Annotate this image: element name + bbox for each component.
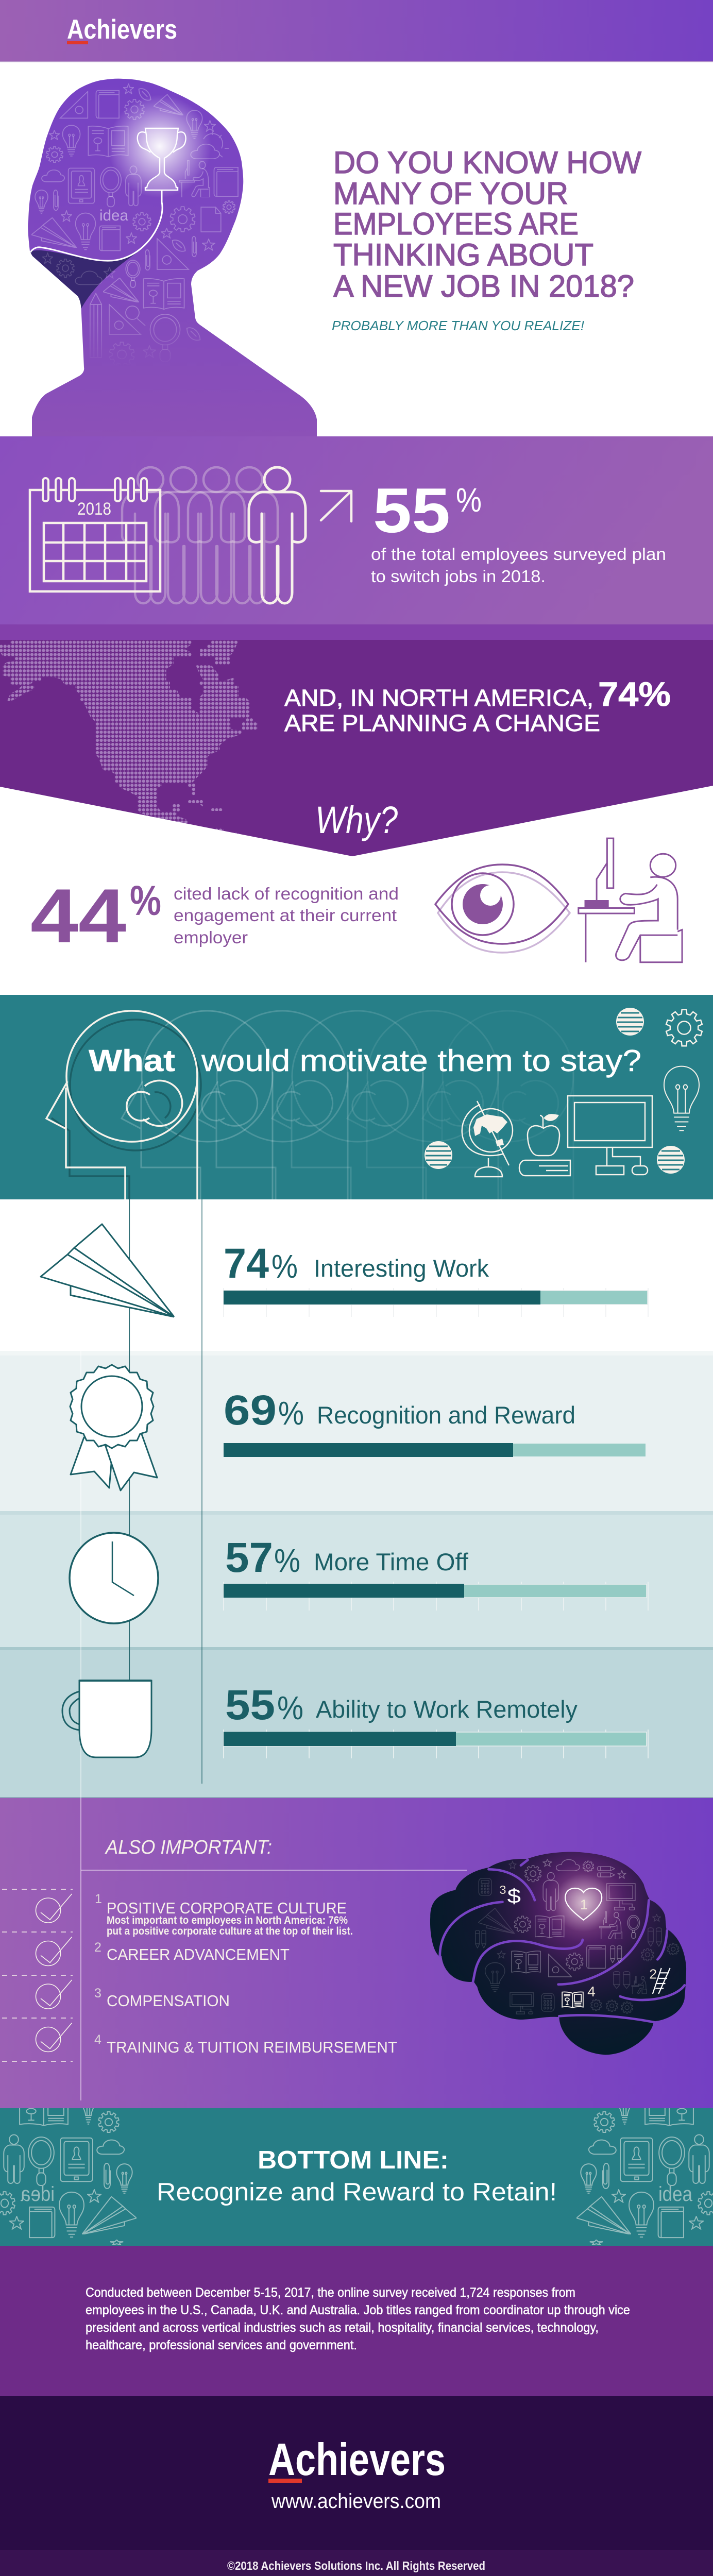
icon: striped circles (425, 1008, 685, 1174)
stat: 55 percent: % (277, 1689, 303, 1726)
logo: Achievers footer: Achievers (268, 2434, 446, 2485)
text: methodology (86, 2285, 630, 2352)
text: bottom line: Recognize and Reward to Retain! (157, 2178, 557, 2206)
heading: do you know: A NEW JOB IN 2018? (333, 269, 634, 303)
icon label: idea: idea (99, 207, 128, 224)
icon: ladder (653, 1968, 670, 1994)
pattern: right icons: idea (658, 2183, 693, 2206)
stat: 69 percent (224, 1387, 575, 1434)
icon: repeating ghost heads (122, 1011, 573, 1206)
bar: 57 percent (224, 1582, 648, 1611)
icon: paper plane (41, 1224, 174, 1317)
panel: footer (0, 2396, 713, 2576)
text: methodology: Conducted between December 5-15, 2017, the online survey received 1,724 responses from (86, 2285, 575, 2300)
panel: what would motivate them to stay (0, 995, 713, 1206)
brain numerals: 1 (580, 1897, 588, 1912)
stat: 55 percent: 55 (225, 1682, 275, 1728)
heading: what would motivate: What (89, 1044, 175, 1078)
stat: 55 percent: 55 (373, 476, 450, 546)
text: north america statistic: ARE PLANNING A CHANGE (284, 710, 600, 736)
text: survey description: to switch jobs in 2018. (371, 567, 546, 586)
stat: 69 percent: Recognition and Reward (317, 1401, 575, 1429)
pattern: right icons (576, 2108, 713, 2245)
stat: 74 percent: Interesting Work (314, 1255, 489, 1282)
text: methodology: president and across vertical industries such as retail, hospitality, financial services, technology, (86, 2320, 599, 2335)
panel: bottom line (0, 2108, 713, 2246)
list: ranked motivators: put a positive corporate culture at the top of their list. (107, 1925, 353, 1937)
text: lack of recognition: employer (174, 928, 248, 947)
text: lack of recognition (174, 884, 399, 947)
text: methodology: employees in the U.S., Canada, U.K. and Australia. Job titles ranged from coordinator up through vice (86, 2303, 630, 2317)
list: ranked motivators: 4 (94, 2032, 101, 2047)
text: bottom line: BOTTOM LINE: (258, 2146, 449, 2174)
icon: calendar 2018 (30, 478, 160, 591)
row: ability to work remotely (62, 1680, 648, 1758)
icon: heart (554, 1874, 613, 1932)
brain numerals: 2 (649, 1967, 657, 1982)
brain numerals: 4 (587, 1983, 596, 1999)
icon: coffee mug (62, 1680, 151, 1757)
stat: 57 percent: More Time Off (314, 1548, 469, 1575)
brain icons, bright (512, 1859, 639, 1977)
arrow: up and to the right (321, 491, 351, 521)
bar: 74 percent (224, 1288, 648, 1317)
pattern: left icons: idea (20, 2183, 55, 2206)
text: lack of recognition: cited lack of recognition and (174, 884, 399, 903)
decorative connecting lines (81, 1199, 202, 1798)
icon: head silhouette with trophy and icons (21, 72, 330, 439)
list: ranked motivators: POSITIVE CORPORATE CULTURE (107, 1899, 347, 1917)
text: copyright: ©2018 Achievers Solutions Inc. All Rights Reserved (227, 2559, 485, 2572)
heading: do you know: MANY OF YOUR (333, 176, 568, 211)
icon: apple on book (519, 1114, 570, 1176)
brain icons, dim (476, 1861, 679, 2014)
stat: 55 percent: Ability to Work Remotely (316, 1696, 578, 1723)
text: methodology: healthcare, professional services and government. (86, 2338, 357, 2352)
icon: brain (430, 1852, 686, 2055)
list: ranked motivators: 2 (94, 1940, 101, 1955)
row: interesting work (41, 1224, 648, 1317)
brain highlighted open book (562, 1992, 583, 2008)
stat: 55 percent (225, 1682, 578, 1728)
icon: front person (249, 467, 305, 603)
stat: 44 percent: 44 (30, 873, 126, 959)
heading: do you know (333, 145, 641, 303)
text: survey description: of the total employees surveyed plan (371, 545, 666, 564)
heading: also important: ALSO IMPORTANT: (105, 1837, 272, 1858)
glow behind trophy (108, 95, 211, 198)
text: lack of recognition: engagement at their current (174, 906, 397, 925)
bar: 55 percent (224, 1730, 648, 1758)
row: recognition and reward (70, 1365, 646, 1490)
stat: 55 percent: % (456, 481, 482, 519)
stat: 44 percent (30, 873, 161, 959)
heading: do you know: EMPLOYEES ARE (333, 207, 579, 241)
icon: gear (666, 1010, 702, 1046)
icon: light bulb (664, 1066, 699, 1130)
icon: eye (435, 865, 570, 953)
icon: monitor (568, 1096, 652, 1175)
icon: clock (70, 1533, 158, 1623)
stat: 57 percent: 57 (225, 1534, 273, 1581)
icon: calendar 2018: 2018 (77, 499, 111, 519)
stat: 74 percent: % (271, 1248, 298, 1285)
stat: 44 percent: % (130, 877, 161, 924)
panel: also important (0, 1798, 713, 2108)
pattern: left icons (0, 2108, 137, 2245)
brain grooves (440, 1860, 685, 2022)
list: ranked motivators (94, 1892, 397, 2056)
ghost people row (122, 467, 278, 603)
dark jaw flap (30, 250, 137, 309)
text: north america statistic (284, 675, 671, 736)
stat: 69 percent: 69 (224, 1387, 277, 1434)
icon: globe (462, 1101, 513, 1177)
list: ranked motivators: TRAINING & TUITION REIMBURSEMENT (107, 2038, 397, 2056)
brain numerals: 3 (499, 1883, 506, 1896)
bar: 69 percent (224, 1443, 646, 1457)
stat: 57 percent: % (274, 1542, 300, 1579)
list: ranked motivators: CAREER ADVANCEMENT (107, 1945, 290, 1963)
stat: 57 percent (225, 1534, 469, 1581)
heading: what would motivate: would motivate them to stay? (201, 1044, 641, 1078)
subheading: probably more: PROBABLY MORE THAN YOU REALIZE! (332, 318, 584, 333)
stat: 55 percent (373, 476, 482, 546)
stat: 69 percent: % (278, 1395, 304, 1432)
list: ranked motivators: 3 (94, 1986, 101, 2001)
text: bottom line (157, 2146, 557, 2206)
text: north america statistic: 74% (598, 675, 671, 713)
icon: ribbon award (70, 1365, 157, 1490)
heading: do you know: DO YOU KNOW HOW (333, 145, 641, 180)
heading: do you know: THINKING ABOUT (333, 238, 593, 272)
text: north america statistic: AND, IN NORTH AMERICA, (284, 685, 593, 711)
text: survey description (371, 545, 666, 586)
list: ranked motivators: 1 (95, 1892, 102, 1906)
icon: line-art head (46, 1011, 201, 1206)
list: ranked motivators: Most important to employees in North America: 76% (107, 1914, 348, 1926)
text: website: www.achievers.com (271, 2490, 441, 2513)
panel: header bar with logo (0, 0, 713, 62)
stat: 74 percent (224, 1240, 489, 1287)
icons: decorative line art cluster (425, 1008, 702, 1177)
brain numerals: $ (507, 1885, 521, 1907)
list: ranked motivators: COMPENSATION (107, 1992, 230, 2010)
icons filling the head (31, 84, 238, 367)
text: why: Why? (315, 799, 398, 841)
stat: 74 percent: 74 (224, 1240, 269, 1287)
panel: north america band (0, 624, 713, 856)
icon: person at desk (579, 838, 682, 962)
brain numerals (499, 1883, 657, 1999)
logo: Achievers: Achievers (67, 14, 177, 45)
panel: motivation rows (0, 1199, 713, 1798)
icon: trophy (30, 128, 186, 261)
checklist: check marks and dashes (2, 1889, 73, 2061)
row: more time off (70, 1533, 648, 1623)
panel: survey methodology (0, 2246, 713, 2396)
panel: 55 percent statistic (0, 436, 713, 624)
map: dotted north america (0, 640, 258, 834)
